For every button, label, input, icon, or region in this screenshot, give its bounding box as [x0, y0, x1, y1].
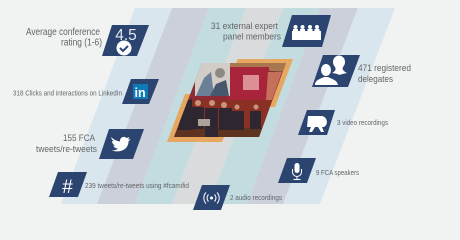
label: conference rating	[26, 27, 102, 48]
badge: hashtag icon: #	[62, 177, 73, 198]
badge: Twitter bird icon	[99, 129, 144, 159]
badge: hashtag icon	[49, 172, 87, 198]
label: LinkedIn clicks: 318 Clicks and interactions on LinkedIn	[13, 90, 122, 98]
background bands	[61, 8, 395, 204]
badge: LinkedIn icon	[122, 79, 159, 104]
badge: delegates icon	[312, 55, 360, 87]
badge: microphone icon	[278, 158, 316, 183]
stat: LinkedIn	[13, 79, 159, 104]
badge: LinkedIn icon: in	[134, 86, 146, 100]
label: registered delegates: 471 registered	[358, 63, 411, 74]
label: FCA speakers: 9 FCA speakers	[316, 170, 359, 177]
label: video recordings: 3 video recordings	[337, 120, 388, 127]
photo image	[174, 63, 286, 137]
label: panel members: panel members	[223, 32, 281, 42]
badge: audio broadcast icon	[193, 185, 230, 210]
photo frame: orange corners	[167, 59, 293, 142]
stat: expert panel members	[211, 15, 331, 47]
label: panel members: 31 external expert	[211, 21, 278, 32]
label: registered delegates	[358, 63, 411, 85]
infographic canvas	[13, 8, 410, 210]
label: FCA tweets: tweets/re-tweets	[36, 144, 97, 155]
stat: hashtag tweets	[49, 172, 189, 198]
label: FCA tweets: 155 FCA	[63, 133, 96, 144]
photo: conference panel	[167, 59, 293, 142]
label: conference rating: rating (1-6)	[61, 38, 102, 48]
label: audio recordings: 2 audio recordings	[230, 195, 282, 202]
stat: conference rating	[26, 25, 149, 56]
stat: registered delegates	[312, 55, 411, 87]
label: conference rating: Average conference	[26, 27, 100, 38]
badge: video camera icon	[298, 110, 335, 135]
badge: panel table icon	[282, 15, 331, 47]
stat: audio recordings	[193, 185, 282, 210]
stat: FCA tweets	[36, 129, 144, 159]
label: panel members	[211, 21, 281, 42]
label: FCA tweets	[36, 133, 97, 155]
stat: FCA speakers	[278, 158, 359, 183]
label: registered delegates: delegates	[358, 74, 393, 85]
badge: 4.5 with check: 4.5	[115, 27, 137, 44]
label: hashtag tweets: 239 tweets/re-tweets using #fcamifid	[85, 183, 189, 190]
stat: video recordings	[298, 110, 388, 135]
